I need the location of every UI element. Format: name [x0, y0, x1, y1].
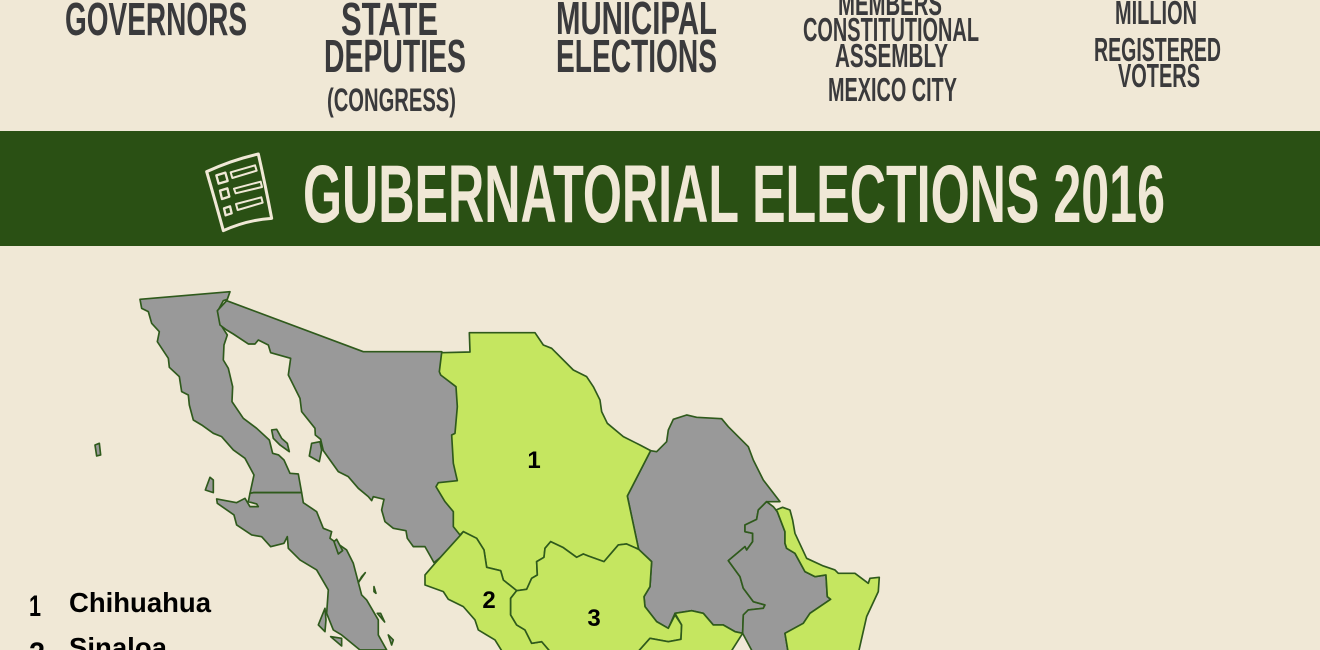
map number 3: 3	[587, 605, 601, 632]
map region: northwest gray states	[95, 292, 463, 650]
map of Mexico	[95, 292, 879, 650]
category: state deputies: (CONGRESS)	[327, 82, 456, 118]
legend	[29, 587, 211, 650]
legend entry: Chihuahua: Chihuahua	[69, 587, 211, 618]
state: Nuevo Leon	[728, 502, 831, 650]
category: constitutional assembly: MEXICO CITY	[828, 71, 957, 108]
legend entry: Chihuahua	[29, 587, 211, 623]
category: state deputies: DEPUTIES	[324, 30, 466, 82]
state: Sinaloa	[425, 532, 552, 650]
category: constitutional assembly	[803, 0, 979, 108]
map number 2: 2	[482, 587, 496, 614]
state: Durango	[511, 542, 682, 650]
legend entry: Chihuahua: 1	[29, 590, 41, 623]
map number 1: 1	[527, 447, 541, 474]
state: Zacatecas	[637, 611, 743, 650]
title band	[0, 131, 1320, 246]
category: state deputies	[324, 0, 466, 118]
category: municipal elections	[556, 0, 717, 82]
category: constitutional assembly: ASSEMBLY	[835, 37, 948, 74]
category: registered voters	[1094, 0, 1221, 94]
state: Tamaulipas	[776, 507, 879, 650]
state: Chihuahua	[436, 333, 651, 591]
icon: ballot sheet	[207, 154, 272, 231]
category: registered voters: VOTERS	[1118, 57, 1200, 94]
category: constitutional assembly: CONSTITUTIONAL	[803, 11, 979, 48]
category: registered voters: REGISTERED	[1094, 31, 1221, 68]
map region: states with elections and neighbours	[425, 333, 879, 650]
state: Coahuila	[627, 415, 780, 633]
category: municipal elections: ELECTIONS	[556, 30, 717, 82]
